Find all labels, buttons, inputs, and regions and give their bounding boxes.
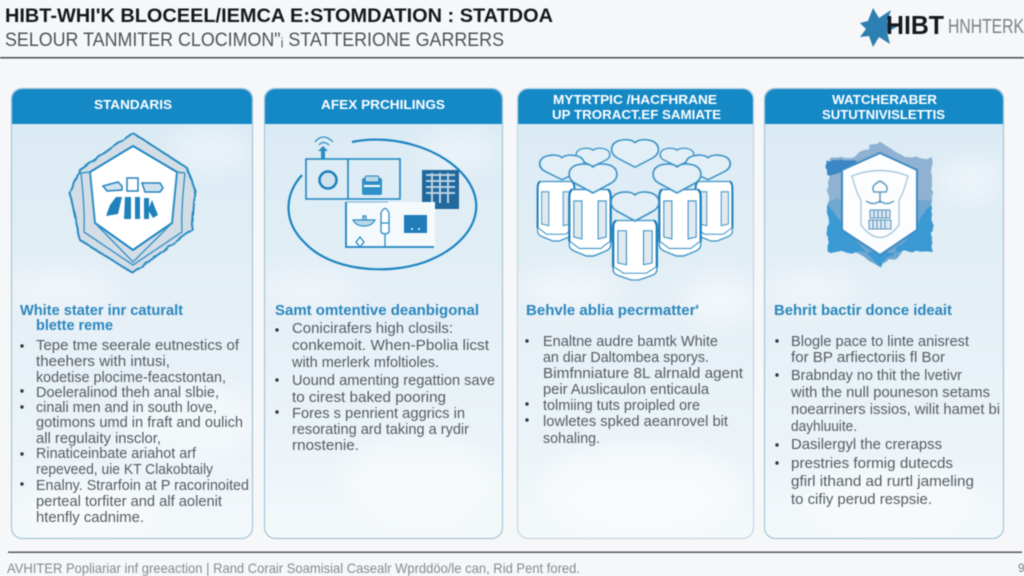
bullet list: Doeleralinod theh anal slbie, [36, 385, 219, 401]
bullet list: Fores s penrient aggrics in [292, 406, 465, 422]
bullet list [275, 321, 495, 454]
bullet list: Bimfnniature 8L alrnald agent [543, 366, 743, 382]
bullet list: cinali men and in south love, [36, 400, 217, 416]
icon: star [860, 8, 897, 47]
logo [860, 8, 1024, 47]
bullet list: Enaltne audre bamtk White [543, 334, 718, 350]
bullet list: Rinaticeinbate ariahot arf [36, 446, 197, 462]
bullet list: kodetise plocime-feacstontan, [36, 370, 226, 386]
panel text heading: White stater inr caturalt [20, 302, 183, 319]
panel heading: MYTRTPIC /HACFHRANE [553, 92, 717, 107]
panel text heading: Behvle ablia pecrmatter' [526, 302, 699, 319]
panel heading: UP TRORACT.EF SAMIATE [552, 107, 721, 122]
bullet list: tolmiing tuts proipled ore [543, 398, 700, 414]
bullet list: Uound amenting regattion save [292, 373, 495, 389]
panel: watcher substitutes [760, 88, 1005, 539]
bullet list: for BP arfiectoriis fl Bor [791, 350, 945, 366]
header [5, 6, 553, 51]
bullet list: gfirl ithand ad rurtl jameling [791, 474, 974, 490]
bullet list: perteal torfiter and alf aolenit [36, 494, 222, 510]
panel text heading [20, 302, 183, 334]
logo wordmark: HIBT [886, 10, 944, 40]
icon: shield [826, 142, 932, 267]
bullet list: to cirest baked pooring [292, 390, 446, 406]
panel text heading: blette reme [36, 317, 113, 334]
bullet list: resorating ard taking a rydir [292, 422, 469, 438]
bullet list: to cifiy perud respsie. [791, 492, 932, 508]
bullet list [20, 338, 249, 526]
bullet list: peir Auslicaulon enticaula [543, 382, 710, 398]
panel heading: WATCHERABER [832, 92, 938, 107]
icon: badge [70, 133, 195, 273]
panel heading: AFEX PRCHILINGS [321, 97, 445, 112]
panel text heading: Samt omtentive deanbigonal [275, 302, 479, 319]
bullet list: rnostenie. [292, 438, 359, 454]
panel heading [822, 92, 945, 122]
panel: apex privileges [260, 88, 503, 539]
panel: standards [0, 88, 260, 539]
bullet list: lowletes spked aeanrovel bit [543, 414, 728, 430]
bullet list: with the null pouneson setams [790, 385, 990, 401]
title: HIBT-WHI'K BLOCEEL/IEMCA E:STOMDATION : STATDOA [5, 6, 553, 27]
bullet list: Conicirafers high closils: [292, 321, 453, 337]
panel: hearts and cylinders [517, 88, 760, 539]
bullet list: Brabnday no thit the lvetivr [791, 368, 962, 384]
icon: network diagram [288, 137, 476, 269]
panel heading: STANDARIS [94, 97, 172, 112]
icon: heart cylinders [538, 140, 732, 280]
footer: AVHITER Popliariar inf greeaction | Rand Corair Soamisial Casealr Wprddöo/le can, Rid Pent fored. [7, 560, 580, 576]
bullet list: sohaling. [543, 431, 600, 447]
bullet list: all regulaity insclor, [36, 431, 161, 447]
bullet list: repeveed, uie KT Clakobtaily [36, 462, 214, 478]
panel heading: SUTUTNIVISLETTIS [822, 107, 945, 122]
bullet list: htenfly cadnime. [36, 510, 144, 526]
bullet list: gotimons umd in fraft and oulich [36, 415, 243, 431]
bullet list: with merlerk mfoltioles. [291, 355, 439, 371]
bullet list: Tepe tme seerale eutnestics of [36, 338, 240, 354]
bullet list: theehers with intusi, [36, 354, 170, 370]
subtitle: SELOUR TANMITER CLOCIMON"ᵢ STATTERIONE GARRERS [5, 30, 504, 51]
bullet list: prestries formig dutecds [791, 456, 953, 472]
bullet list: dayhluuite. [791, 419, 857, 435]
bullet list: Enalny. Strarfoin at P racorinoited [36, 478, 249, 494]
bullet list: conkemoit. When-Pbolia licst [292, 338, 489, 354]
bullet list: noearriners issios, wilit hamet bi [791, 402, 1000, 418]
bullet list [775, 334, 1000, 508]
bullet list: an diar Daltombea sporys. [543, 350, 709, 366]
bullet list [525, 334, 743, 447]
panel heading [552, 92, 721, 122]
bullet list: Blogle pace to linte anisrest [791, 334, 969, 350]
bullet list: Dasilergyl the crerapss [791, 437, 942, 453]
panel text heading: Behrit bactir donce ideait [774, 302, 952, 319]
